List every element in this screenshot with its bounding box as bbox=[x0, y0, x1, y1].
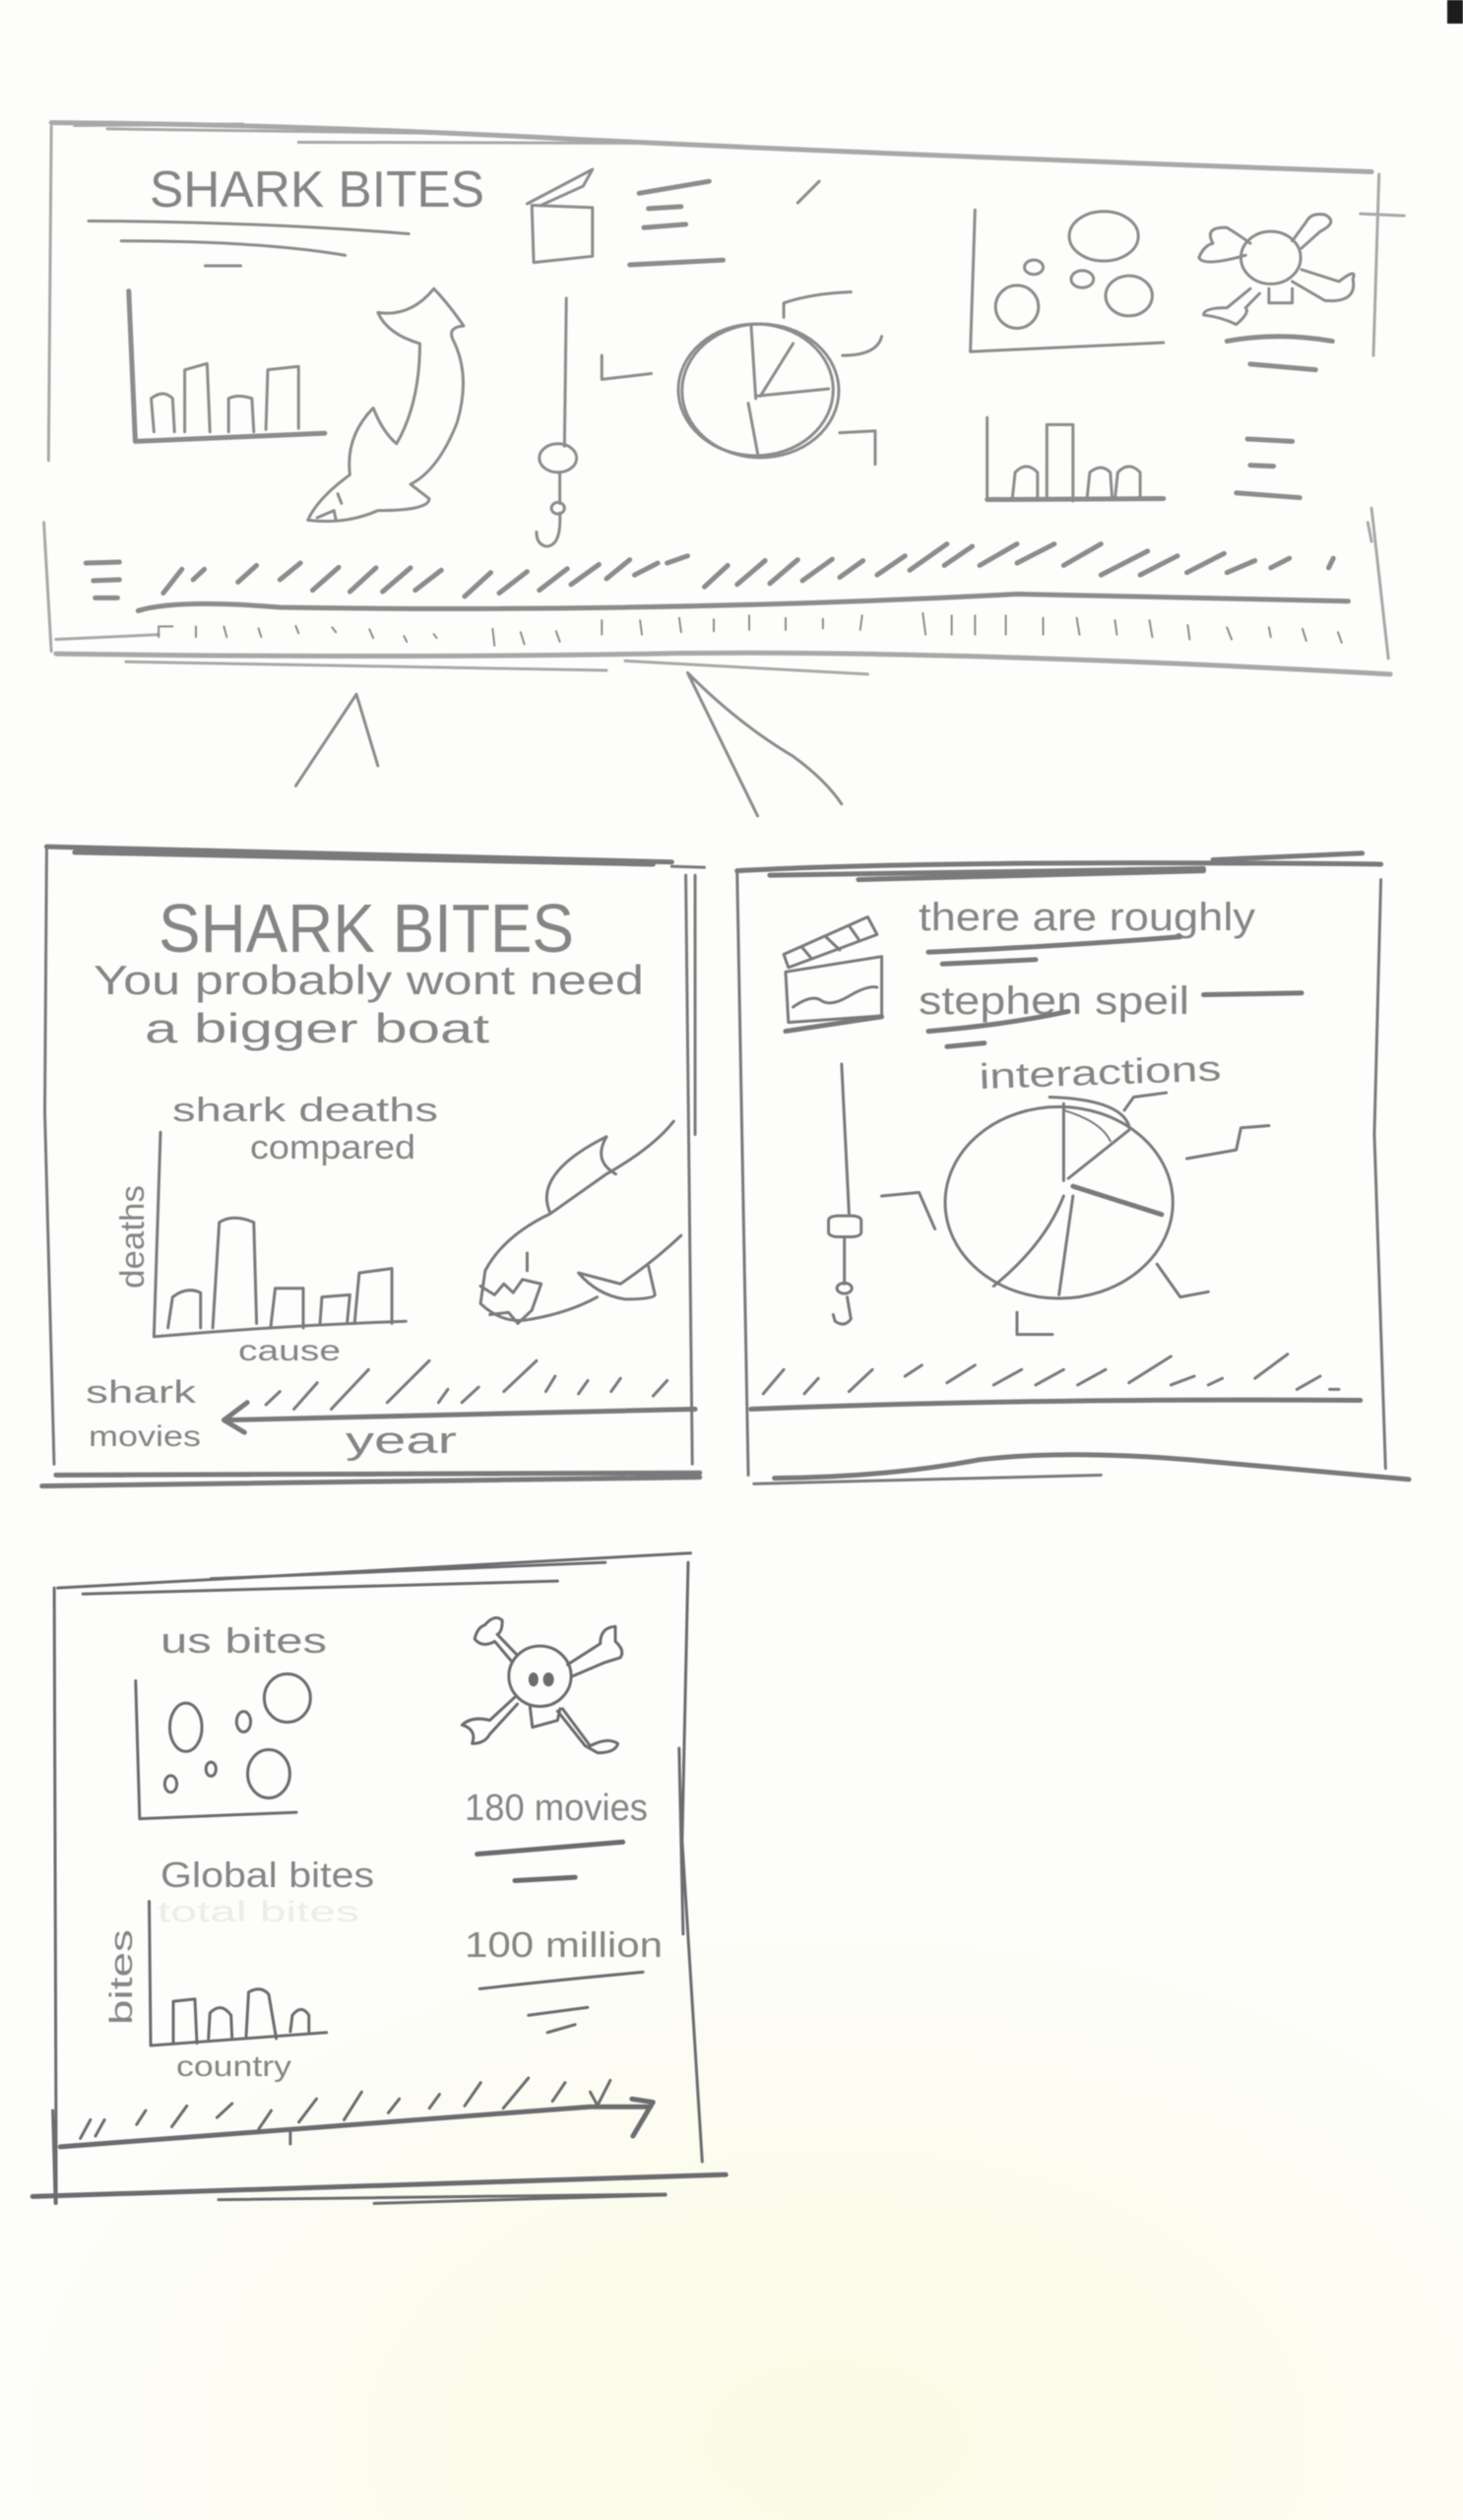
x axis label: country bbox=[176, 2050, 291, 2083]
title underlines bbox=[89, 220, 409, 266]
panel: mobile interactions bbox=[737, 853, 1409, 1483]
pie chart with callouts bbox=[602, 292, 882, 465]
panel frame bbox=[42, 847, 705, 1486]
icon: fishing hook bbox=[537, 298, 577, 546]
arrow: to second mobile panel bbox=[687, 672, 842, 816]
icon: fishing hook bbox=[829, 1064, 861, 1324]
icon: diving shark bbox=[308, 288, 464, 522]
chart title: us bites: us bites bbox=[160, 1620, 327, 1661]
icon: skull and crossbones bbox=[462, 1618, 622, 1753]
chart title: shark deaths bbox=[172, 1092, 438, 1129]
icon: clapperboard bbox=[527, 169, 593, 263]
timeline label: shark bbox=[86, 1374, 197, 1410]
panel frame bbox=[44, 123, 1404, 674]
bar chart: deaths by cause bbox=[154, 1132, 406, 1337]
x axis label: cause bbox=[238, 1335, 341, 1367]
bar chart: global bites bbox=[150, 1902, 327, 2046]
corner mark bbox=[1447, 0, 1463, 24]
y axis label: bites bbox=[103, 1929, 139, 2025]
icon: skull and crossbones bbox=[1199, 215, 1354, 370]
pie chart title: interactions bbox=[979, 1047, 1222, 1097]
bar chart: global bites bbox=[987, 417, 1300, 501]
stat underlines bbox=[928, 937, 1302, 1046]
panel: mobile bites bbox=[32, 1553, 726, 2203]
stat underlines bbox=[479, 1972, 643, 2033]
y axis label: deaths bbox=[114, 1185, 152, 1289]
faint erased label: total bites bbox=[158, 1896, 359, 1928]
panel: mobile intro bbox=[42, 847, 705, 1486]
icon: shark head bbox=[480, 1121, 681, 1323]
timeline: shark movies bbox=[86, 544, 1348, 646]
timeline with left arrow bbox=[223, 1360, 695, 1432]
stat text: there are roughly bbox=[919, 896, 1255, 939]
subheading: You probably wont need bbox=[94, 957, 644, 1003]
pie chart with callouts bbox=[882, 1093, 1269, 1335]
bubble chart bbox=[136, 1673, 310, 1819]
stat underlines bbox=[477, 1842, 623, 1880]
timeline bbox=[751, 1354, 1361, 1409]
stat: 100 million: 100 million bbox=[465, 1924, 663, 1965]
chart title: global bites: Global bites bbox=[160, 1855, 374, 1895]
icon: clapperboard bbox=[784, 917, 882, 1032]
bar chart: deaths bbox=[129, 291, 325, 441]
panel: overview sketch bbox=[44, 123, 1404, 674]
text lines bbox=[630, 181, 819, 265]
timeline axis label: year bbox=[346, 1420, 458, 1462]
chart title line two: compared bbox=[250, 1129, 415, 1166]
panel frame bbox=[737, 853, 1409, 1483]
arrow: to mobile panel bbox=[295, 694, 378, 786]
bubble chart bbox=[971, 210, 1164, 351]
timeline label line two: movies bbox=[89, 1420, 201, 1453]
subheading line two: a bigger boat bbox=[145, 1005, 489, 1051]
stat: 180 movies: 180 movies bbox=[465, 1788, 648, 1829]
panel frame bbox=[32, 1553, 726, 2203]
stat text line two: stephen speil bbox=[919, 979, 1189, 1023]
title: SHARK BITES bbox=[150, 161, 484, 219]
heading: SHARK BITES bbox=[159, 890, 574, 967]
timeline with right arrow bbox=[60, 2078, 653, 2147]
